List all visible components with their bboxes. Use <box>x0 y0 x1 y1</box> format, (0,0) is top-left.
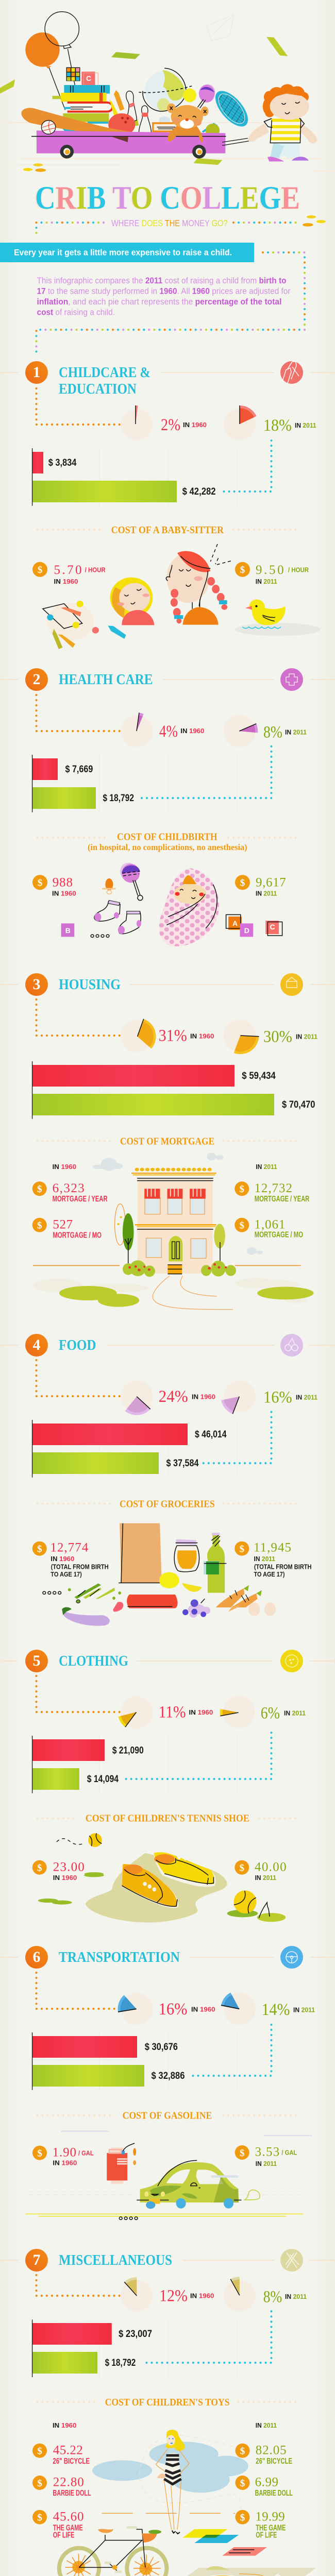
percent 1960 <box>159 1703 213 1722</box>
percent 1960: IN 1960 <box>183 421 207 429</box>
subheading: COST OF CHILDREN'S TENNIS SHOE <box>86 1813 249 1824</box>
rubik cube <box>66 67 80 81</box>
green strips <box>0 37 288 165</box>
pie 2011 <box>224 715 258 747</box>
percent 2011: 6% <box>261 1704 280 1722</box>
intro paragraph <box>37 276 291 317</box>
pie 2011 <box>224 1020 259 1054</box>
percent 2011: 16% <box>263 1388 292 1406</box>
block letters: C <box>270 923 275 931</box>
sub panel: cost of groceries <box>32 1499 311 1626</box>
mortgage per month 2011: $ <box>240 1220 244 1231</box>
prices 2011 <box>235 2443 293 2540</box>
illustration: car and gas can <box>26 2131 312 2219</box>
percent 2011 <box>263 723 307 742</box>
subheading: COST OF CHILDBIRTH <box>117 832 217 843</box>
percent 2011 <box>263 1388 317 1406</box>
intro paragraph: cost of raising a child. <box>37 308 115 317</box>
price 2011: 11,945 <box>254 1541 291 1555</box>
price 2011: 3.53 <box>255 2145 279 2159</box>
percent 1960 <box>159 2287 214 2306</box>
price 2011: TO AGE 17) <box>254 1570 284 1578</box>
percent 2011 <box>261 1704 306 1722</box>
percent 2011 <box>263 416 316 435</box>
pie 2011 <box>224 405 257 440</box>
price 1960: $ <box>37 2148 42 2159</box>
subheading: (in hospital, no complications, no anesthesia) <box>88 842 247 852</box>
wagon <box>31 121 250 159</box>
price 1960 <box>54 563 106 585</box>
price 2011 <box>256 563 309 585</box>
percent 1960: IN 1960 <box>190 2292 214 2300</box>
percent 1960 <box>161 416 207 434</box>
percent 2011: IN 2011 <box>285 2293 307 2300</box>
prices 2011: OF LIFE <box>256 2531 277 2540</box>
section 5: clothing <box>0 1650 335 1793</box>
title: CRIB TO COLLEGE <box>35 179 300 216</box>
intro paragraph: 17 to the same study performed in 1960. All 1960 prices are adjusted for <box>37 286 291 296</box>
number badge: 1 <box>33 364 40 381</box>
block letters: D <box>244 926 249 935</box>
price 1960 <box>32 1860 85 1882</box>
section 3: housing <box>0 973 335 1119</box>
icon: crossed pencils <box>280 2249 303 2272</box>
prices 2011: 19.99 <box>255 2510 285 2524</box>
mortgage per month 1960: MORTGAGE / MO <box>53 1231 102 1240</box>
price 1960: 988 <box>53 876 73 890</box>
illustration: eggplant, grapes, potatoes <box>62 1602 276 1626</box>
bar chart: $ 59,434 <box>242 1071 276 1081</box>
banner <box>0 243 254 262</box>
sub panel: cost of mortgage <box>32 1136 314 1310</box>
bar chart <box>32 2319 237 2377</box>
section heading: HEALTH CARE <box>59 671 153 688</box>
price 2011: (TOTAL FROM BIRTH <box>254 1563 311 1570</box>
pie 1960 <box>121 1381 153 1415</box>
coin 1960 <box>32 875 47 890</box>
illustration: groceries <box>43 1523 262 1614</box>
pie 2011 <box>224 2277 256 2312</box>
multicoloured dotted connectors <box>36 223 305 355</box>
pie 1960 <box>118 1993 153 2025</box>
percent 1960 <box>159 722 204 741</box>
percent 2011: IN 2011 <box>296 1394 317 1401</box>
bar chart: $ 7,669 <box>65 764 93 775</box>
price 2011: $ <box>240 1863 244 1873</box>
bar chart: $ 32,886 <box>152 2071 185 2081</box>
bar chart <box>32 1736 237 1793</box>
hero illustration: wagon of toys and boy <box>0 12 335 227</box>
boy <box>248 84 317 161</box>
section 4: food <box>0 1334 335 1478</box>
number badge: 7 <box>33 2251 40 2268</box>
section heading: CHILDCARE & <box>59 364 150 381</box>
pie 1960 <box>121 405 153 440</box>
percent 1960 <box>159 1027 214 1045</box>
percent 1960: 31% <box>159 1027 187 1045</box>
subtitle: WHERE DOES THE MONEY GO? <box>111 218 228 228</box>
year labels: IN 1960 <box>53 2421 76 2429</box>
intro paragraph: This infographic compares the 2011 cost of raising a child from birth to <box>37 276 287 285</box>
percent 2011 <box>263 2287 307 2306</box>
section heading: HOUSING <box>59 976 121 993</box>
number badge <box>25 1334 48 1357</box>
number badge <box>25 361 48 384</box>
mortgage per year 2011: $ <box>240 1184 244 1195</box>
price 2011: IN 2011 <box>254 1555 275 1563</box>
block letters: B <box>65 926 71 935</box>
percent 1960: 2% <box>161 416 180 434</box>
percent 2011: IN 2011 <box>293 2006 315 2013</box>
percent 1960: 12% <box>159 2287 188 2306</box>
number badge: 6 <box>33 1948 40 1965</box>
bar chart: $ 46,014 <box>195 1429 227 1440</box>
percent 2011 <box>262 2001 315 2019</box>
price 1960: IN 1960 <box>51 1555 74 1563</box>
paper plane <box>207 14 234 41</box>
bar chart: $ 23,007 <box>119 2329 152 2340</box>
mortgage per year 2011: MORTGAGE / YEAR <box>255 1195 309 1204</box>
prices 1960: BARBIE DOLL <box>53 2489 91 2498</box>
banner: Every year it gets a little more expensive to raise a child. <box>14 247 232 258</box>
illustration: baby-sitter and child <box>43 544 321 649</box>
price 2011: $ <box>240 2148 244 2159</box>
percent 1960 <box>159 1387 215 1406</box>
price 2011: / GAL <box>281 2148 297 2156</box>
price 2011: / HOUR <box>288 566 309 574</box>
prices 1960: 26" BICYCLE <box>53 2457 90 2466</box>
percent 1960: IN 1960 <box>180 727 204 735</box>
pie 2011 <box>221 1993 256 2025</box>
subheading: COST OF GROCERIES <box>120 1499 215 1510</box>
price 1960: 1.90 <box>53 2146 76 2160</box>
price 2011: 9,617 <box>256 876 286 890</box>
price 2011: IN 2011 <box>256 889 277 897</box>
section 2: health care <box>0 668 335 812</box>
price 1960: IN 1960 <box>54 578 78 585</box>
price 1960: TO AGE 17) <box>51 1570 82 1578</box>
maraca <box>197 84 215 108</box>
mortgage per month 2011: MORTGAGE / MO <box>255 1231 303 1240</box>
bar chart: $ 37,584 <box>166 1458 199 1469</box>
price 1960 <box>52 876 76 897</box>
number badge: 5 <box>33 1652 40 1669</box>
percent 2011: 14% <box>262 2001 290 2019</box>
bar chart <box>32 755 237 812</box>
mortgage per year 1960: $ <box>37 1184 42 1195</box>
section heading: CLOTHING <box>59 1653 128 1669</box>
gold coins <box>23 163 326 227</box>
pie 1960 <box>119 1697 153 1728</box>
bar chart <box>32 448 237 506</box>
bar chart: $ 18,792 <box>103 793 134 804</box>
price 2011: 9.50 <box>256 563 284 577</box>
percent 1960: IN 1960 <box>189 1708 213 1716</box>
price 2011 <box>235 2145 297 2167</box>
price 2011 <box>234 1541 311 1578</box>
percent 2011: 8% <box>263 2287 282 2306</box>
subheading: COST OF A BABY-SITTER <box>111 524 224 536</box>
globe <box>139 68 196 123</box>
price 1960 <box>32 2146 94 2167</box>
percent 2011: 18% <box>263 416 292 435</box>
bar chart: $ 42,282 <box>182 486 216 497</box>
bar chart: $ 30,676 <box>145 2042 178 2053</box>
mortgage per year 1960: MORTGAGE / YEAR <box>53 1195 108 1204</box>
prices 1960: 22.80 <box>53 2476 84 2489</box>
price 1960: / GAL <box>78 2149 94 2157</box>
bar chart: $ 3,834 <box>48 457 77 468</box>
prices 1960 <box>32 2443 91 2540</box>
percent 2011: IN 2011 <box>285 728 307 736</box>
mortgage per month 1960: $ <box>37 1220 42 1231</box>
percent 1960: 11% <box>159 1703 186 1722</box>
prices 1960: $ <box>37 2446 42 2456</box>
block and book stack <box>53 72 112 132</box>
price 1960: IN 1960 <box>53 1874 77 1882</box>
price 1960 <box>32 1541 109 1578</box>
coin 2011 <box>235 562 250 577</box>
illustration: barbie, bicycle, game board <box>32 2430 316 2576</box>
illustration: house <box>33 1153 314 1310</box>
price 1960: IN 1960 <box>53 2159 77 2167</box>
mortgage per year 2011 <box>234 1181 309 1204</box>
number badge: 3 <box>33 976 40 993</box>
subheading: COST OF CHILDREN'S TOYS <box>105 2397 230 2408</box>
illustration: baby, rattle, socks, blocks <box>61 862 282 946</box>
coin 1960: $ <box>38 878 42 888</box>
bar chart: $ 18,792 <box>105 2358 136 2368</box>
number badge <box>25 973 48 996</box>
prices 2011: 82.05 <box>256 2443 287 2457</box>
number badge <box>25 668 48 691</box>
year labels: IN 2011 <box>256 1163 277 1171</box>
prices 2011: 26" BICYCLE <box>256 2457 292 2466</box>
prices 2011: BARBIE DOLL <box>255 2489 293 2498</box>
pie 1960 <box>121 1019 156 1052</box>
pie 1960 <box>121 2277 153 2312</box>
number badge <box>25 1650 48 1672</box>
price 1960: / HOUR <box>85 566 106 574</box>
price 1960: 12,774 <box>50 1541 89 1555</box>
sub panel: cost of a baby-sitter <box>32 524 321 649</box>
price 1960: $ <box>37 1863 42 1873</box>
icon: cherries <box>280 1334 303 1357</box>
percent 2011: IN 2011 <box>284 1709 306 1717</box>
bar chart: $ 70,470 <box>282 1099 315 1110</box>
section heading: TRANSPORTATION <box>59 1949 180 1965</box>
section 7: miscellaneous <box>0 2249 335 2377</box>
section heading: FOOD <box>59 1337 96 1353</box>
bar chart <box>32 1420 237 1478</box>
price 2011 <box>234 1860 287 1882</box>
price 2011: $ <box>240 1544 244 1555</box>
section heading: EDUCATION <box>59 381 137 397</box>
small book <box>152 122 175 132</box>
subheading: COST OF GASOLINE <box>123 2110 212 2122</box>
block letters: A <box>232 919 238 927</box>
baseball bat and ball <box>21 108 132 138</box>
mortgage per year 1960: 6,323 <box>53 1181 85 1195</box>
icon: house <box>280 973 303 996</box>
coin 2011 <box>235 875 250 890</box>
price 2011: IN 2011 <box>256 578 277 585</box>
sub panel: cost of children's toys <box>32 2397 316 2576</box>
year labels <box>53 1163 277 1171</box>
section heading <box>59 364 150 397</box>
prices 1960: 45.60 <box>53 2510 83 2524</box>
sub panel: cost of children's tennis shoe <box>32 1813 297 1923</box>
year labels <box>53 2421 277 2429</box>
price 1960: 23.00 <box>53 1860 85 1874</box>
prices 2011: $ <box>240 2512 245 2523</box>
price 1960: IN 1960 <box>52 889 76 897</box>
number badge: 2 <box>33 671 40 688</box>
price 1960: $ <box>37 1544 42 1555</box>
bar chart <box>32 1061 315 1119</box>
prices 1960: $ <box>37 2512 42 2523</box>
prices 2011: $ <box>240 2446 245 2456</box>
icon: steering wheel <box>280 1946 303 1969</box>
price 1960: (TOTAL FROM BIRTH <box>51 1563 109 1570</box>
percent 1960: 16% <box>159 2000 188 2019</box>
percent 1960: 24% <box>159 1387 188 1406</box>
mortgage per month 2011 <box>234 1217 303 1240</box>
mortgage per month 1960 <box>32 1217 102 1240</box>
bar chart: $ 21,090 <box>112 1745 144 1756</box>
icon: button <box>280 1650 303 1672</box>
price 2011: 40.00 <box>255 1860 287 1874</box>
tennis racket and ball <box>202 87 253 138</box>
percent 2011 <box>263 1027 317 1046</box>
percent 2011: 8% <box>263 723 282 742</box>
icon: pencils <box>280 361 303 384</box>
coin 2011: $ <box>240 565 245 575</box>
teddy bear <box>167 104 209 142</box>
mortgage per year 2011: 12,732 <box>254 1181 292 1195</box>
price 2011: IN 2011 <box>256 2160 277 2167</box>
mortgage per month 1960: 527 <box>53 1217 73 1231</box>
title: CRIB TO COLLEGE <box>34 180 299 216</box>
prices 2011: THE GAME <box>256 2523 286 2532</box>
section 6: transportation <box>0 1946 335 2090</box>
percent 1960: IN 1960 <box>192 1393 215 1400</box>
prices 1960: 45.22 <box>53 2443 83 2457</box>
pie 1960 <box>121 713 153 747</box>
prices 1960: OF LIFE <box>53 2531 74 2540</box>
illustration: shoes and tennis balls <box>38 1833 286 1923</box>
prices 1960: $ <box>37 2478 42 2489</box>
pie 2011 <box>220 1696 255 1728</box>
year labels: IN 1960 <box>53 1163 76 1171</box>
percent 1960: 4% <box>159 722 178 741</box>
number badge <box>25 2249 48 2272</box>
coin 1960 <box>32 562 47 577</box>
subheading: COST OF MORTGAGE <box>120 1136 214 1147</box>
number badge: 4 <box>33 1336 40 1353</box>
bowling pins and ball <box>108 91 152 135</box>
section heading: MISCELLANEOUS <box>59 2252 172 2268</box>
prices 2011: 6.99 <box>255 2476 278 2489</box>
block letter: C <box>86 74 91 82</box>
coin 2011: $ <box>240 878 245 888</box>
price 2011: IN 2011 <box>255 1874 276 1882</box>
section 1: childcare and education <box>0 361 335 506</box>
subheading <box>88 832 247 852</box>
icon: plus <box>280 668 303 691</box>
number badge <box>25 1946 48 1969</box>
pie 2011 <box>221 1381 256 1414</box>
coin 1960: $ <box>38 565 42 575</box>
mortgage per year 1960 <box>32 1181 108 1204</box>
percent 2011: IN 2011 <box>295 421 316 429</box>
percent 2011: IN 2011 <box>296 1033 317 1041</box>
bar chart <box>32 2032 237 2090</box>
price 2011 <box>256 876 286 897</box>
balloons <box>25 12 79 110</box>
percent 1960 <box>159 2000 215 2019</box>
mortgage per month 2011: 1,061 <box>254 1217 285 1231</box>
price 1960: 5.70 <box>54 563 81 577</box>
prices 1960: THE GAME <box>53 2523 83 2532</box>
year labels: IN 2011 <box>256 2421 277 2429</box>
bar chart: $ 14,094 <box>87 1774 119 1785</box>
sub panel: cost of gasoline <box>26 2110 312 2219</box>
prices 2011: $ <box>240 2478 245 2489</box>
percent 2011: 30% <box>263 1027 292 1046</box>
block letters <box>65 919 275 935</box>
percent 1960: IN 1960 <box>190 1032 214 1040</box>
sub panel: cost of childbirth <box>32 832 297 946</box>
crayons <box>109 90 139 126</box>
intro paragraph: inflation, and each pie chart represents the percentage of the total <box>37 297 281 307</box>
percent 1960: IN 1960 <box>191 2005 215 2013</box>
